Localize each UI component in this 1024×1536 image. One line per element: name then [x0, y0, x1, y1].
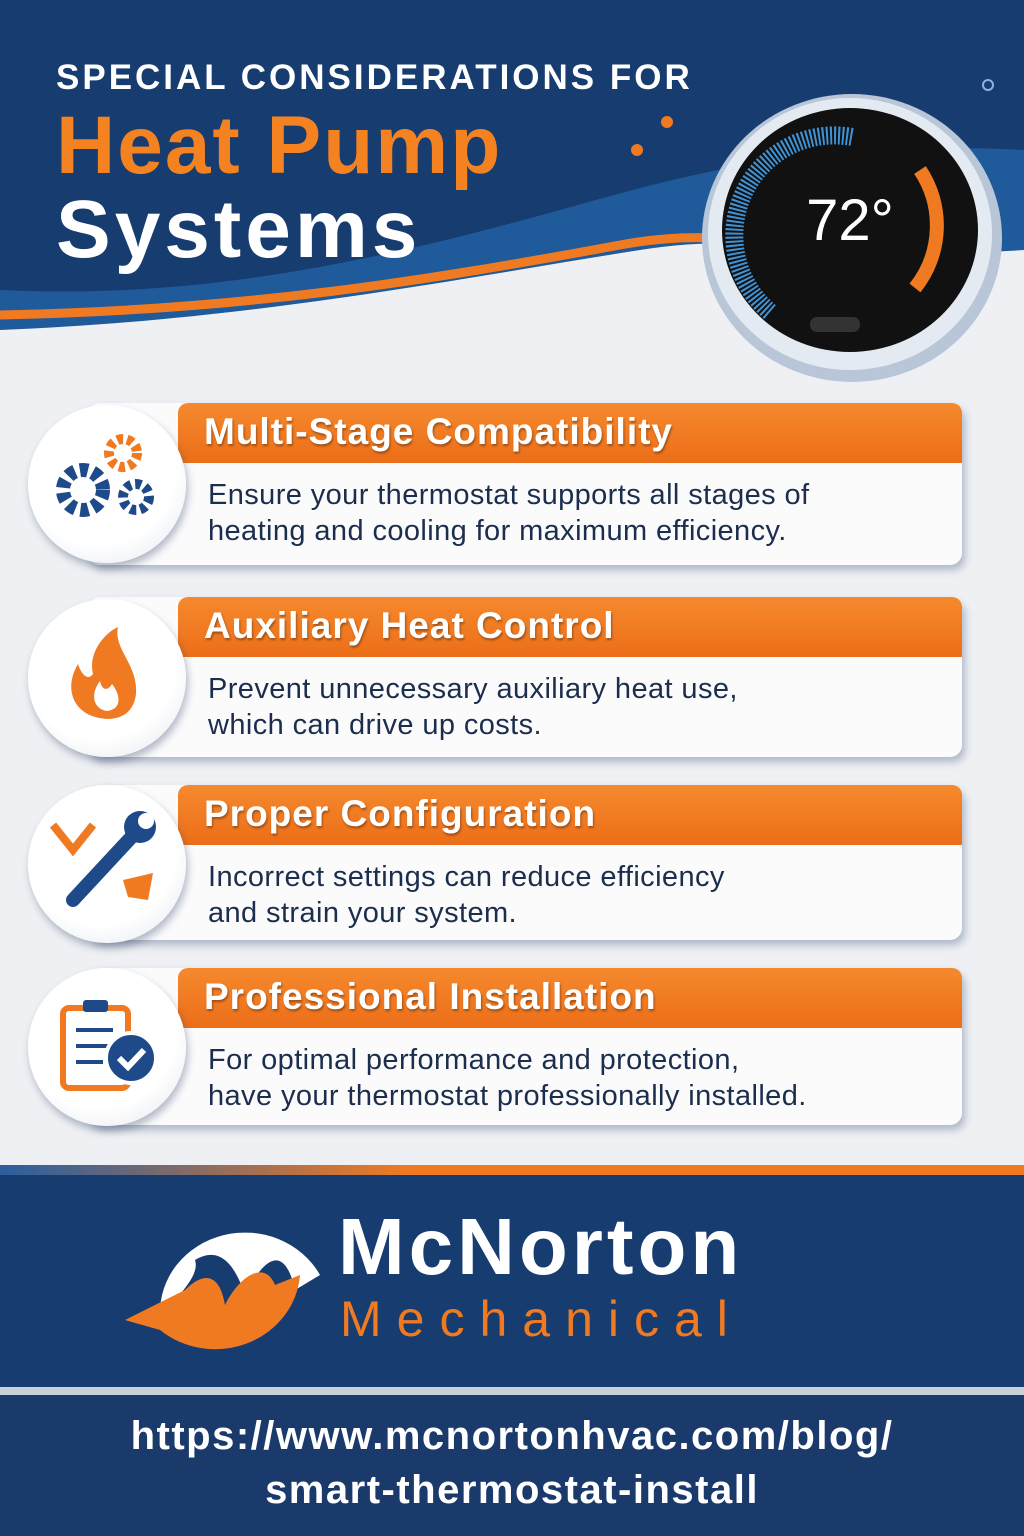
card 3: Proper Configuration: [204, 793, 596, 834]
title: Systems: [56, 184, 421, 275]
card 4: For optimal performance and protection,: [208, 1044, 739, 1076]
url band: https://www.mcnortonhvac.com/blog/: [131, 1414, 893, 1458]
icon: flame: [28, 599, 186, 757]
icon: thermostat: 72°: [806, 188, 894, 253]
title: [56, 58, 693, 275]
url band: smart-thermostat-install: [265, 1468, 759, 1512]
card 4: [26, 967, 970, 1136]
brand name: McNorton: [338, 1202, 743, 1291]
card 3: [26, 784, 970, 953]
card 3: Incorrect settings can reduce efficiency: [208, 861, 725, 893]
footer logo band: Mechanical: [340, 1291, 743, 1347]
footer logo band: [0, 1165, 1024, 1387]
card 1: heating and cooling for maximum efficiency.: [208, 515, 787, 547]
card 2: which can drive up costs.: [208, 709, 542, 741]
icon: thermostat: [702, 94, 1002, 382]
logo mark: [125, 1232, 320, 1350]
card 2: Auxiliary Heat Control: [204, 605, 615, 646]
card 1: Ensure your thermostat supports all stages of: [208, 479, 810, 511]
title: SPECIAL CONSIDERATIONS FOR: [56, 58, 693, 97]
icon: gears: [28, 405, 186, 563]
card 4: have your thermostat professionally installed.: [208, 1080, 807, 1112]
card 1: [26, 403, 970, 575]
title: Heat Pump: [56, 100, 502, 191]
url band: [0, 1395, 1024, 1536]
card 2: Prevent unnecessary auxiliary heat use,: [208, 673, 738, 705]
card 3: and strain your system.: [208, 897, 517, 929]
card 1: Multi-Stage Compatibility: [204, 411, 673, 452]
card 4: Professional Installation: [204, 976, 657, 1017]
card 2: [26, 597, 970, 768]
header background: [0, 0, 1024, 330]
icon: clipboard check: [28, 968, 186, 1126]
icon: wrench: [28, 785, 186, 943]
